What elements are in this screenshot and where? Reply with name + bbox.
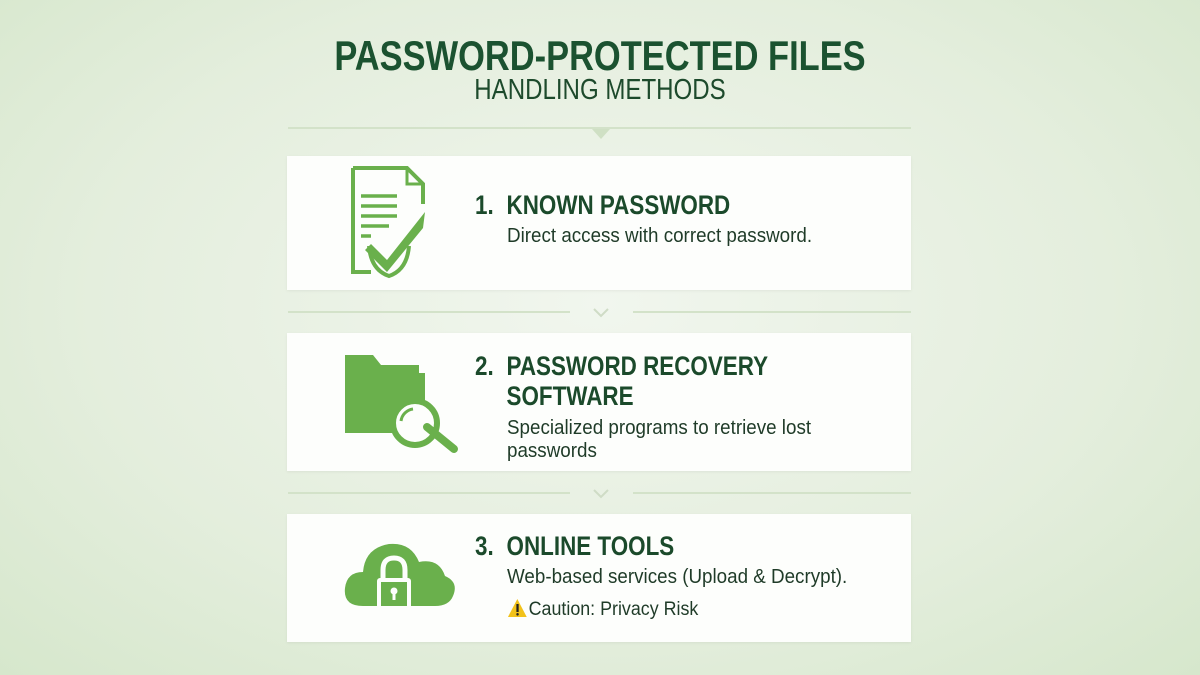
description 3: Web-based services (Upload & Decrypt). [507,566,847,588]
icon: cloud with lock [344,544,455,606]
heading 2 [475,351,768,411]
panel: known password [287,156,911,290]
description 2 [507,417,811,462]
description 2: Specialized programs to retrieve lost [507,417,811,439]
panel: known password: 1. [475,190,494,220]
panel: recovery software: PASSWORD RECOVERY [507,351,768,381]
description 1: Direct access with correct password. [507,225,812,247]
panel: online tools [287,514,911,642]
description 2: passwords [507,440,597,462]
heading 1 [475,190,730,220]
icon: warning [508,599,527,617]
caution note: Caution: Privacy Risk [529,599,698,620]
arrow: chevron 2 [594,490,608,498]
arrow: chevron 1 [594,308,608,318]
panel: recovery software: 2. [475,351,494,381]
icon: document with check [351,166,425,278]
icon: folder with magnifier [345,355,458,453]
subtitle: HANDLING METHODS [474,74,726,106]
title: PASSWORD-PROTECTED FILES [334,32,866,79]
panel: recovery software: SOFTWARE [507,381,634,411]
arrow: top pointer [592,129,610,139]
panel: recovery software [287,333,911,471]
panel: online tools: 3. [475,531,494,561]
panel: online tools: ONLINE TOOLS [507,531,674,561]
heading 3 [475,531,674,561]
panel: known password: KNOWN PASSWORD [507,190,730,220]
